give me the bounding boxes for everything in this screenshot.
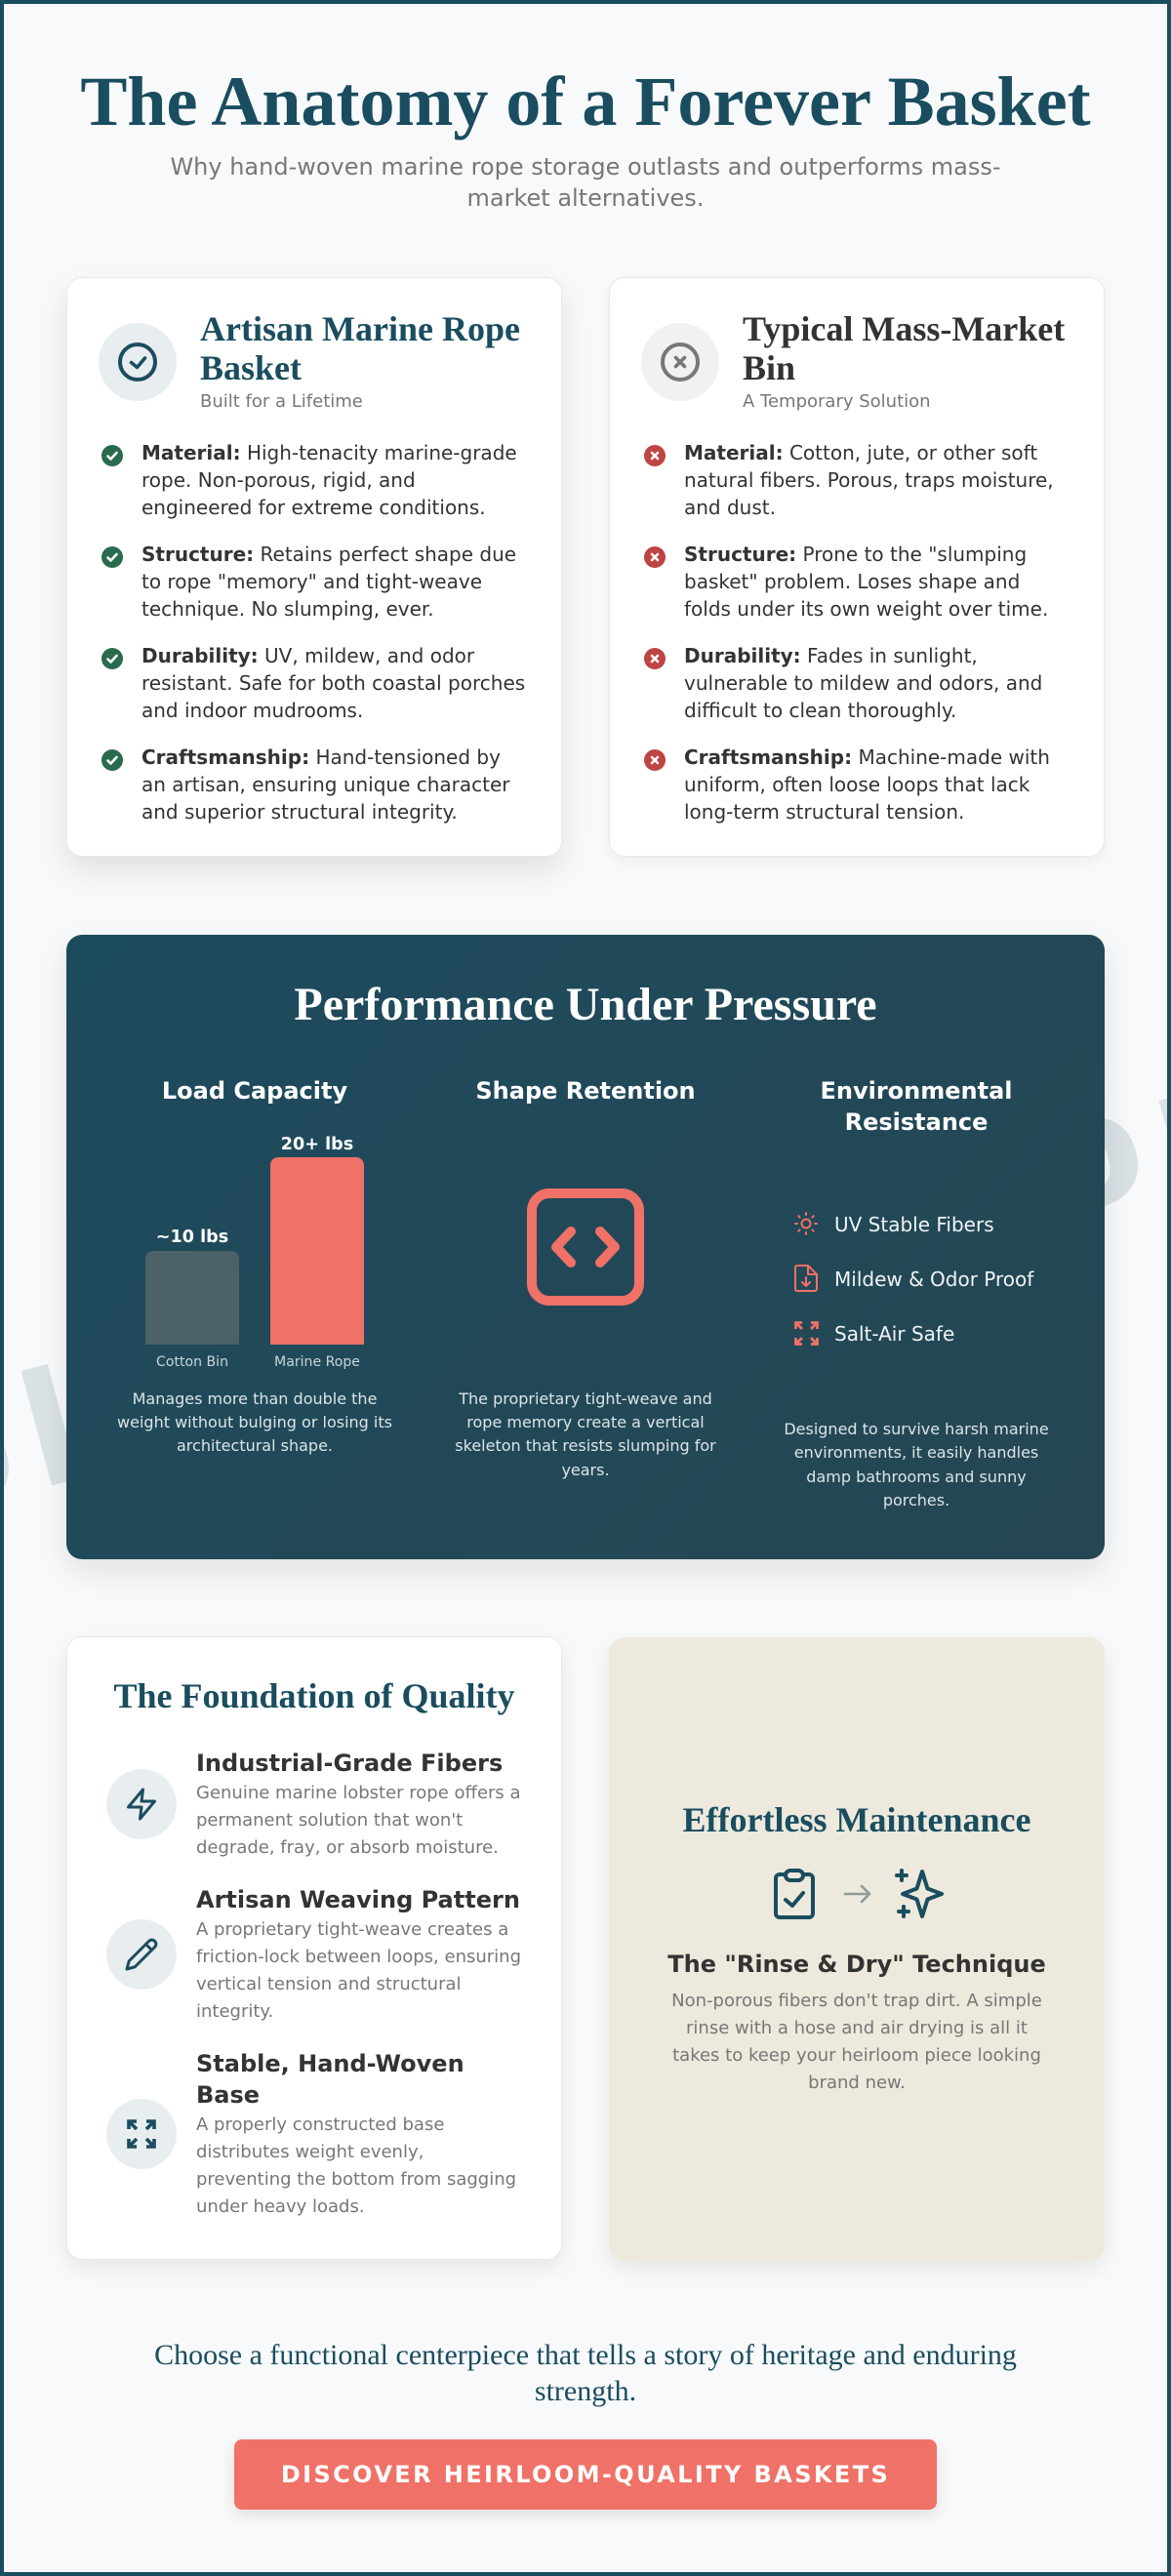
row text: Genuine marine lobster rope offers a bbox=[196, 1783, 521, 1803]
description: weight without bulging or losing its bbox=[117, 1413, 392, 1431]
panel: typical mass-market bin bbox=[609, 277, 1105, 857]
item: structure bbox=[101, 543, 516, 621]
item: material: Material: High-tenacity marine-grade bbox=[141, 441, 517, 464]
item: durability: and indoor mudrooms. bbox=[141, 699, 363, 722]
item: durability: difficult to clean thoroughly. bbox=[684, 699, 956, 722]
item: craftsmanship: long-term structural tension. bbox=[684, 800, 964, 824]
panel: artisan marine rope basket bbox=[66, 277, 562, 857]
row: base bbox=[106, 2050, 516, 2217]
call to action button bbox=[234, 2439, 937, 2510]
heading: foundation: The Foundation of Quality bbox=[113, 1676, 515, 1715]
call to action button: DISCOVER HEIRLOOM-QUALITY BASKETS bbox=[281, 2461, 890, 2488]
subheading: typical: A Temporary Solution bbox=[743, 390, 931, 412]
row: fibers bbox=[106, 1750, 521, 1858]
column heading: Shape Retention bbox=[475, 1077, 696, 1105]
item: durability bbox=[644, 644, 1042, 722]
description bbox=[117, 1389, 392, 1455]
item: material: engineered for extreme conditions. bbox=[141, 496, 486, 519]
item: material: natural fibers. Porous, traps moisture, bbox=[684, 468, 1054, 492]
heading: artisan: Basket bbox=[200, 348, 302, 387]
description: architectural shape. bbox=[177, 1436, 333, 1455]
icon: expand bbox=[106, 2099, 177, 2169]
row text: A proprietary tight-weave creates a bbox=[196, 1919, 508, 1940]
row text bbox=[196, 1783, 521, 1858]
closing statement: strength. bbox=[535, 2375, 636, 2406]
description: damp bathrooms and sunny bbox=[806, 1468, 1027, 1486]
description: Manages more than double the bbox=[133, 1389, 377, 1407]
description: environments, it easily handles bbox=[794, 1443, 1038, 1462]
heading: maintenance: Effortless Maintenance bbox=[683, 1799, 1030, 1838]
description: rinse with a hose and air drying is all it bbox=[686, 2018, 1028, 2038]
item: craftsmanship bbox=[644, 745, 1050, 824]
panel: effortless maintenance bbox=[609, 1637, 1105, 2261]
heading: typical: Typical Mass-Market bbox=[743, 309, 1065, 348]
item: structure bbox=[644, 543, 1048, 621]
text: salt-air: Salt-Air Safe bbox=[834, 1321, 954, 1345]
description: brand new. bbox=[808, 2073, 906, 2093]
description bbox=[784, 1420, 1049, 1509]
description: porches. bbox=[883, 1491, 949, 1509]
row text: friction-lock between loops, ensuring bbox=[196, 1947, 521, 1967]
item: craftsmanship: uniform, often loose loops that lack bbox=[684, 773, 1030, 796]
description: Designed to survive harsh marine bbox=[784, 1420, 1049, 1438]
heading: performance: Performance Under Pressure bbox=[294, 979, 877, 1030]
row text: permanent solution that won't bbox=[196, 1810, 463, 1831]
row: weaving bbox=[106, 1886, 521, 2022]
row text: degrade, fray, or absorb moisture. bbox=[196, 1837, 499, 1858]
item: material: rope. Non-porous, rigid, and bbox=[141, 468, 416, 492]
row heading: Industrial-Grade Fibers bbox=[196, 1750, 503, 1777]
column heading: Environmental bbox=[820, 1077, 1013, 1105]
row text: preventing the bottom from sagging bbox=[196, 2168, 516, 2190]
description: The proprietary tight-weave and bbox=[459, 1389, 712, 1407]
icon: file bbox=[794, 1265, 818, 1292]
text: mildew: Mildew & Odor Proof bbox=[834, 1267, 1033, 1290]
icon: clipboard bbox=[776, 1871, 813, 1917]
column: shape retention bbox=[455, 1077, 716, 1479]
subtitle: market alternatives. bbox=[467, 184, 704, 212]
icon: sun bbox=[794, 1212, 818, 1235]
icon: expand bbox=[794, 1321, 819, 1346]
label: cotton: Cotton Bin bbox=[156, 1354, 228, 1370]
item: structure: folds under its own weight over time. bbox=[684, 597, 1048, 621]
heading: typical: Bin bbox=[743, 348, 795, 387]
item: structure: basket" problem. Loses shape and bbox=[684, 570, 1020, 593]
description bbox=[455, 1389, 716, 1479]
item: durability: resistant. Safe for both coastal porches bbox=[141, 671, 525, 695]
row text: vertical tension and structural bbox=[196, 1974, 462, 1994]
text: uv: UV Stable Fibers bbox=[834, 1212, 994, 1235]
bar chart bbox=[145, 1134, 364, 1370]
heading: artisan: Artisan Marine Rope bbox=[200, 309, 520, 348]
icon: arrow bbox=[845, 1886, 869, 1902]
column heading: Load Capacity bbox=[162, 1077, 347, 1105]
subheading: rinse and dry: The "Rinse & Dry" Technique bbox=[667, 1950, 1046, 1977]
row heading: Base bbox=[196, 2081, 260, 2109]
bar: rope bbox=[270, 1157, 364, 1345]
label: rope: Marine Rope bbox=[274, 1354, 360, 1370]
row text bbox=[196, 2113, 516, 2217]
subtitle bbox=[170, 153, 1001, 212]
closing statement: Choose a functional centerpiece that tells a story of heritage and enduring bbox=[154, 2339, 1017, 2371]
item: structure: technique. No slumping, ever. bbox=[141, 597, 434, 621]
item: structure: Structure: Prone to the "slumping bbox=[684, 543, 1027, 566]
subheading: artisan: Built for a Lifetime bbox=[200, 390, 363, 412]
item: craftsmanship: Craftsmanship: Hand-tensioned by bbox=[141, 745, 501, 769]
row heading: Artisan Weaving Pattern bbox=[196, 1886, 520, 1913]
item: durability bbox=[101, 644, 525, 722]
title: The Anatomy of a Forever Basket bbox=[80, 62, 1091, 141]
description: years. bbox=[561, 1461, 610, 1479]
heading: artisan bbox=[200, 309, 520, 387]
description: skeleton that resists slumping for bbox=[455, 1436, 716, 1455]
item: material: Material: Cotton, jute, or other soft bbox=[684, 441, 1037, 464]
column: environmental resistance bbox=[784, 1077, 1049, 1509]
item: durability: Durability: UV, mildew, and odor bbox=[141, 644, 474, 667]
item: structure: Structure: Retains perfect shape due bbox=[141, 543, 516, 566]
bar: cotton bbox=[145, 1251, 239, 1345]
value: rope: 20+ lbs bbox=[281, 1134, 353, 1153]
panel: foundation of quality bbox=[66, 1636, 562, 2260]
column heading: Resistance bbox=[845, 1108, 988, 1136]
row text: integrity. bbox=[196, 2001, 273, 2022]
column: load capacity bbox=[117, 1077, 392, 1455]
closing statement bbox=[154, 2339, 1017, 2406]
item: durability: Durability: Fades in sunlight, bbox=[684, 644, 978, 667]
value: cotton: ~10 lbs bbox=[156, 1228, 228, 1247]
icon row: clipboard to sparkle bbox=[774, 1869, 945, 1919]
row text bbox=[196, 1919, 521, 2022]
heading: typical bbox=[743, 309, 1066, 387]
description: takes to keep your heirloom piece looking bbox=[672, 2045, 1041, 2066]
row text: under heavy loads. bbox=[196, 2195, 365, 2217]
item: material bbox=[644, 441, 1054, 519]
column heading bbox=[820, 1077, 1013, 1136]
panel: performance under pressure bbox=[66, 935, 1105, 1559]
watermark bbox=[0, 1013, 1171, 1556]
item: material bbox=[101, 441, 517, 519]
item: craftsmanship: Craftsmanship: Machine-made with bbox=[684, 745, 1050, 769]
description: rope memory create a vertical bbox=[466, 1413, 705, 1431]
row heading: Stable, Hand-Woven bbox=[196, 2050, 464, 2077]
item: craftsmanship bbox=[101, 745, 510, 824]
item: structure: to rope "memory" and tight-weave bbox=[141, 570, 482, 593]
row heading bbox=[196, 2050, 464, 2109]
item: material: and dust. bbox=[684, 496, 776, 519]
item: durability: vulnerable to mildew and odors, and bbox=[684, 671, 1042, 695]
icon: x circle bbox=[641, 323, 719, 401]
description: Non-porous fibers don't trap dirt. A simple bbox=[671, 1991, 1042, 2011]
description bbox=[671, 1991, 1042, 2093]
subtitle: Why hand-woven marine rope storage outlasts and outperforms mass- bbox=[170, 153, 1001, 181]
item: craftsmanship: and superior structural integrity. bbox=[141, 800, 458, 824]
icon: bolt bbox=[106, 1769, 177, 1839]
icon: pencil bbox=[106, 1919, 177, 1990]
row text: distributes weight evenly, bbox=[196, 2141, 424, 2162]
row text: A properly constructed base bbox=[196, 2113, 444, 2135]
item: craftsmanship: an artisan, ensuring unique character bbox=[141, 773, 510, 796]
icon: check circle bbox=[99, 323, 177, 401]
icon: sparkle bbox=[897, 1871, 942, 1916]
icon: code square bbox=[527, 1188, 644, 1306]
